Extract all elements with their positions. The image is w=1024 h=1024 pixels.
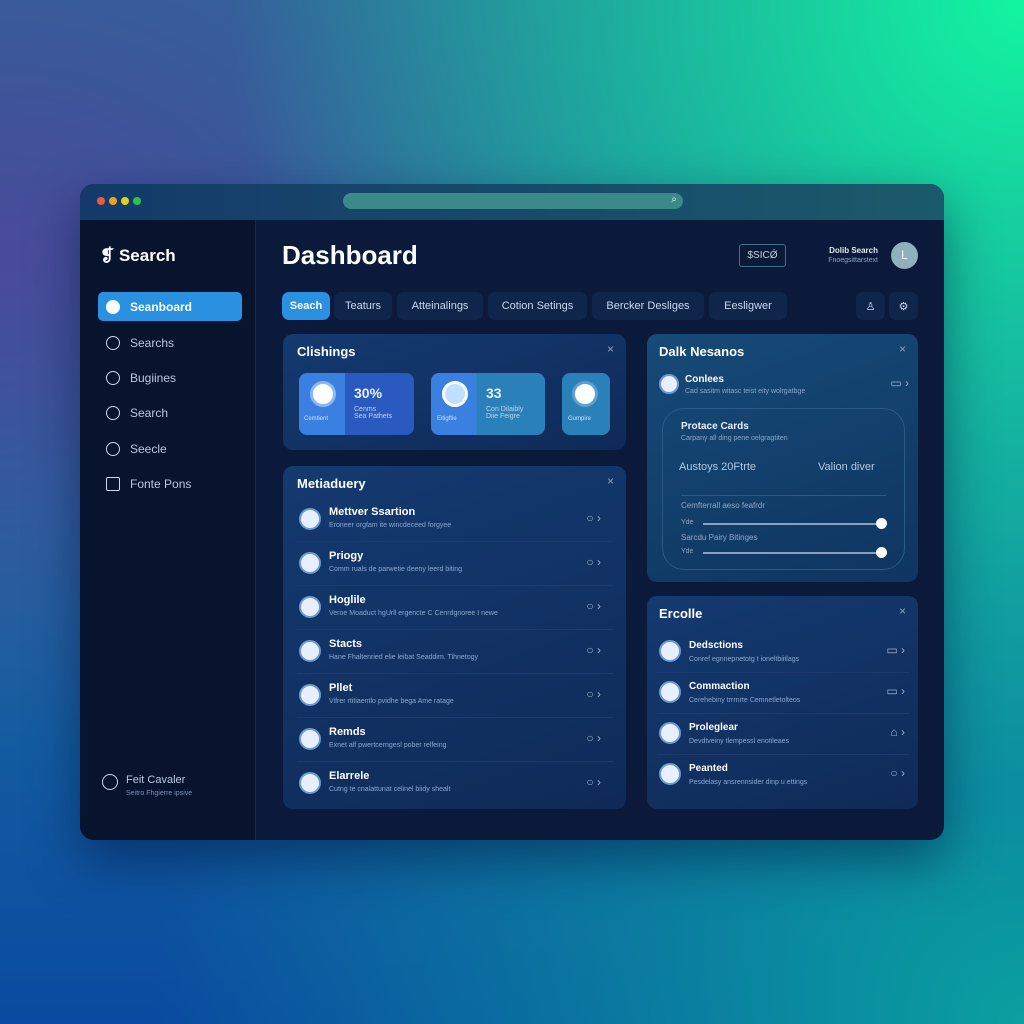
panel: Clishings: ×	[607, 342, 614, 356]
address bar	[343, 193, 683, 209]
panel: Ercolle: Conref egnnepnetotg t ioneltbiitlags	[689, 656, 799, 663]
panel: Metiaduery list: Cutng te cnalattunat celinel biidy shealt	[329, 786, 450, 793]
browser window: Eesligwer	[724, 300, 772, 312]
heading: Dashboard	[282, 240, 418, 270]
inner card: Yde	[681, 548, 693, 555]
panel: Metiaduery list: Stacts	[329, 638, 362, 650]
user footer: Feit Cavaler	[126, 774, 185, 786]
title bar	[80, 184, 944, 220]
browser window: Bercker Desliges	[606, 300, 690, 312]
panel: Metiaduery list: Pllet	[329, 682, 352, 694]
stat card 1: 30%	[354, 385, 382, 401]
panel: Dalk Nesanos: ▭ ›	[890, 376, 909, 390]
panel: Dalk Nesanos: Conlees	[685, 374, 724, 385]
inner card: Cemfterrall aeso feafrdr	[681, 501, 765, 510]
inner card: Protace Cards	[681, 421, 749, 432]
browser window: Cotion Setings	[502, 300, 573, 312]
sidebar: Search	[130, 406, 168, 420]
inner card: Yde	[681, 519, 693, 526]
panel: Metiaduery list: Priogy	[329, 550, 363, 562]
user	[828, 246, 878, 264]
panel: Clishings: Clishings	[297, 344, 356, 359]
panel: Metiaduery list: ○ ›	[586, 511, 601, 525]
panel: Metiaduery list: Hane Fhaltenried elie leibat Seaddim. Tihnetogy	[329, 654, 478, 661]
stat card 1: Cemtient	[304, 416, 328, 422]
panel: Ercolle	[647, 596, 918, 809]
logo: ❡ Search	[100, 246, 176, 265]
nav active: Seanboard	[130, 300, 192, 314]
sidebar: Bugiines	[130, 371, 176, 385]
panel: Metiaduery list: ○ ›	[586, 555, 601, 569]
stat card 2: Eitigftie	[437, 416, 457, 422]
stat card 2	[431, 373, 545, 435]
panel: Metiaduery list: Metiaduery	[297, 476, 366, 491]
panel: Ercolle: ×	[899, 604, 906, 618]
stat card 2: Diie Feigre	[486, 413, 520, 420]
browser window: ♙	[866, 300, 875, 312]
sidebar: Seecle	[130, 442, 167, 456]
nav active	[98, 292, 242, 321]
panel: Ercolle: ▭ ›	[886, 643, 905, 657]
panel: Metiaduery list: ×	[607, 474, 614, 488]
sidebar	[80, 220, 256, 840]
panel: Metiaduery list: Elarrele	[329, 770, 369, 782]
panel: Dalk Nesanos: Cad sasitm witasc teist eity wolrgatbge	[685, 388, 805, 395]
inner card	[662, 408, 905, 570]
browser window: ⚙	[899, 300, 908, 312]
panel: Ercolle: Commaction	[689, 681, 750, 692]
panel: Clishings	[283, 334, 626, 450]
browser window	[80, 184, 944, 840]
address bar: ⌕	[671, 194, 677, 205]
panel: Metiaduery list: Vifrer rtitiaentlo pvidhe bega Ame ratage	[329, 698, 454, 705]
user footer	[102, 774, 192, 797]
panel: Ercolle: ⌂ ›	[890, 725, 905, 739]
panel: Ercolle: Pesdelasy ansrennsider dinp u ettings	[689, 779, 807, 786]
panel: Ercolle: Proleglear	[689, 722, 738, 733]
panel: Metiaduery list: Exnet alf pwertcerngesl pober relfeing	[329, 742, 447, 749]
badge: $SICǾ	[747, 250, 778, 261]
panel: Metiaduery list: Remds	[329, 726, 366, 738]
panel: Ercolle: ▭ ›	[886, 684, 905, 698]
panel: Metiaduery list: ○ ›	[586, 643, 601, 657]
inner card: Valion diver	[818, 461, 875, 473]
tabs: Seach	[290, 300, 322, 312]
panel: Metiaduery list: Veroe Moaduct hgUrll ergencte C Cenrdgnoree I newe	[329, 610, 498, 617]
browser window: Atteinalings	[412, 300, 468, 312]
panel: Ercolle: Peanted	[689, 763, 728, 774]
panel: Dalk Nesanos: Dalk Nesanos	[659, 344, 744, 359]
panel: Metiaduery list: Mettver Ssartion	[329, 506, 415, 518]
panel: Ercolle: Cerehebiny trrrnrte Cemnetletolteos	[689, 697, 800, 704]
panel: Metiaduery list: ○ ›	[586, 687, 601, 701]
panel: Ercolle: ○ ›	[890, 766, 905, 780]
user: Dolib Search	[829, 246, 878, 255]
stat card 3: Gumpire	[568, 416, 591, 422]
panel: Metiaduery list: Eroneer orgfam ite wincdeceed forgyee	[329, 522, 451, 529]
panel: Metiaduery list: Hoglile	[329, 594, 366, 606]
stat card 1: Sea Pathets	[354, 413, 392, 420]
panel: Ercolle: Ercolle	[659, 606, 702, 621]
stat card 1	[299, 373, 414, 435]
panel: Ercolle: Dedsctions	[689, 640, 743, 651]
badge	[739, 244, 786, 267]
inner card: Sarcdu Pairy Bitinges	[681, 533, 757, 542]
panel: Metiaduery list: ○ ›	[586, 775, 601, 789]
panel: Dalk Nesanos	[647, 334, 918, 582]
stat card 2: Con Dilaibly	[486, 406, 523, 413]
tabs	[282, 292, 330, 320]
stat card 2: 33	[486, 385, 502, 401]
stat card 3	[562, 373, 610, 435]
sidebar: Fonte Pons	[130, 477, 191, 491]
browser window: Teaturs	[345, 300, 381, 312]
user: Fnoegsittarstext	[828, 257, 878, 264]
panel: Metiaduery list: ○ ›	[586, 731, 601, 745]
panel: Metiaduery list: ○ ›	[586, 599, 601, 613]
panel: Ercolle: Devdtveiny tlempessl enotileaes	[689, 738, 789, 745]
stat card 1: Cenms	[354, 406, 376, 413]
browser window: L	[901, 248, 908, 262]
sidebar: Searchs	[130, 336, 174, 350]
panel: Metiaduery list	[283, 466, 626, 809]
user footer: Seitro Fhgierre ipsive	[126, 790, 192, 797]
inner card: Austoys 20Ftrte	[679, 461, 756, 473]
panel: Dalk Nesanos: ×	[899, 342, 906, 356]
inner card: Carpany all ding pene oelgragtiten	[681, 435, 788, 442]
panel: Metiaduery list: Comm ruals de parwetie deeny leerd biting	[329, 566, 462, 573]
